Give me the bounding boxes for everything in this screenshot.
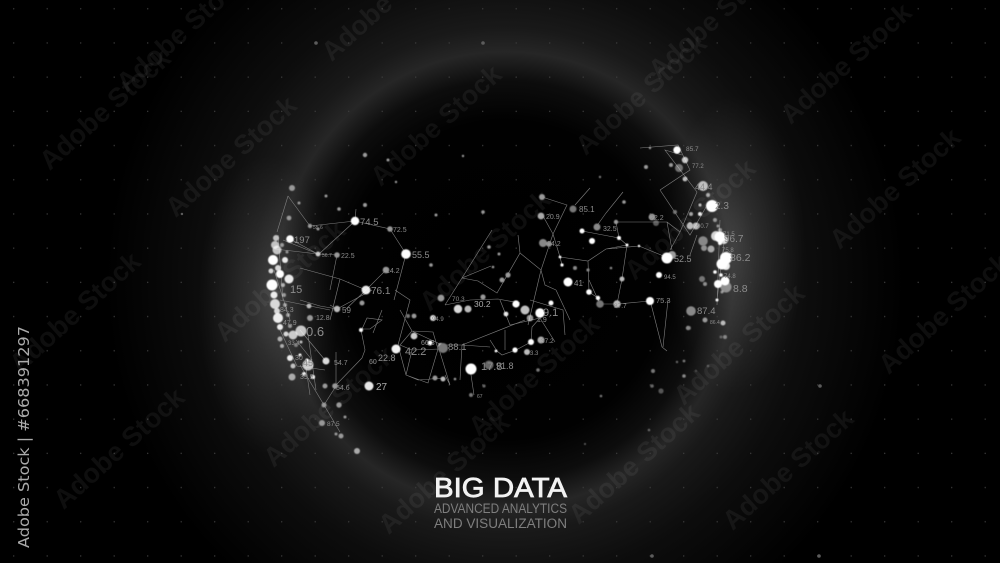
- highlighted grid dots: [181, 41, 822, 558]
- data labels: 20.9: [546, 214, 560, 221]
- central and sparse data nodes: [286, 147, 709, 454]
- data labels: 8.8: [733, 283, 748, 295]
- data labels: 14.2: [386, 268, 400, 275]
- data labels: 22.5: [341, 253, 355, 260]
- title: BIG DATA: BIG DATA: [434, 472, 567, 503]
- data labels: 86.4: [710, 320, 720, 326]
- data labels: 56.7: [322, 253, 332, 259]
- watermark: Adobe Stock: [775, 0, 918, 130]
- data labels: 74.8: [724, 274, 736, 280]
- data labels: 85.7: [686, 146, 699, 153]
- data labels: 94.5: [664, 275, 676, 281]
- data labels: 30: [295, 355, 303, 362]
- data labels: 91.8: [496, 361, 514, 371]
- data labels: 37.2: [541, 338, 554, 345]
- data labels: 76.1: [371, 286, 391, 297]
- watermark: Adobe Stock: [365, 58, 508, 192]
- data labels: 96.7: [724, 234, 744, 245]
- data labels: 27: [376, 382, 388, 393]
- data labels: 2.3: [715, 201, 729, 212]
- glow behind left edge of sphere: [198, 155, 338, 455]
- title block: [434, 472, 567, 531]
- data labels: 87.7: [614, 303, 627, 310]
- right edge cluster: [673, 146, 732, 302]
- data labels: 60: [369, 359, 377, 366]
- watermark: Adobe Stock: [463, 308, 606, 442]
- data labels: 66.3: [421, 340, 435, 347]
- data labels: 30.2: [474, 299, 491, 309]
- data labels: 197: [294, 235, 310, 246]
- watermark: Adobe Stock: [209, 214, 352, 348]
- watermark: Adobe Stock: [34, 42, 177, 176]
- watermark: Adobe Stock: [668, 277, 811, 411]
- watermark: Adobe Stock: [48, 381, 191, 515]
- data labels: 39.9: [300, 374, 314, 381]
- data labels: 0.6: [306, 324, 324, 339]
- watermark: Adobe Stock: [619, 152, 762, 286]
- watermark: Adobe Stock: [824, 121, 967, 255]
- data labels: 86.2: [730, 252, 751, 264]
- data labels: 87.5: [327, 421, 340, 428]
- watermark: Adobe Stock: [373, 406, 516, 540]
- data labels: 55.6: [313, 225, 323, 231]
- data labels: 74.5: [360, 217, 378, 228]
- data labels: 71.5: [723, 232, 735, 238]
- right outer gray nodes: [686, 223, 727, 339]
- data labels: 88.1: [448, 342, 466, 353]
- data labels: 52.5: [674, 254, 692, 264]
- data labels: [280, 146, 751, 428]
- data labels: 1.9: [537, 317, 547, 324]
- watermark: Adobe Stock: [563, 396, 706, 530]
- stock id caption: Adobe Stock | #668391297: [15, 326, 33, 548]
- data labels: 33.4: [288, 341, 300, 347]
- data labels: 44.4: [695, 182, 713, 192]
- data labels: 94.9: [432, 317, 444, 323]
- subtitle lines: ADVANCED ANALYTICS: [434, 501, 567, 516]
- data labels: 85.1: [579, 205, 595, 214]
- data labels: 47.9: [283, 320, 297, 327]
- data labels: 70.3: [452, 296, 465, 303]
- data labels: 12.8: [316, 315, 330, 322]
- data labels: 77.2: [692, 164, 704, 170]
- data labels: 3.3: [530, 351, 539, 357]
- data labels: 55.5: [412, 250, 430, 260]
- watermark: Adobe Stock: [414, 183, 557, 317]
- data labels: 9.1: [543, 307, 558, 319]
- data labels: 75.8: [722, 248, 734, 254]
- network links: [274, 145, 725, 432]
- data labels: 67: [477, 394, 483, 400]
- data labels: 41: [574, 279, 583, 288]
- watermark: Adobe Stock: [4, 245, 147, 379]
- watermark: Adobe Stock: [160, 89, 303, 223]
- data labels: 42.2: [405, 346, 426, 358]
- watermark: Adobe Stock: [717, 402, 860, 536]
- data labels: 72.5: [393, 227, 407, 234]
- data labels: 32.5: [603, 226, 617, 233]
- left edge cluster: [266, 235, 315, 380]
- data labels: 84.3: [280, 307, 294, 314]
- data labels: 87.4: [697, 306, 716, 317]
- data labels: 90.7: [697, 224, 709, 230]
- data labels: 17.8: [481, 361, 502, 373]
- watermark: Adobe Stock: [570, 27, 713, 161]
- data labels: 45: [303, 358, 313, 368]
- data labels: 22.8: [378, 353, 396, 363]
- data labels: 64.2: [547, 241, 561, 248]
- data labels: 22.2: [650, 215, 664, 222]
- watermark: Adobe Stock: [258, 339, 401, 473]
- data labels: 75.3: [656, 296, 671, 305]
- subtitle lines: AND VISUALIZATION: [434, 516, 567, 531]
- subtitle lines: [434, 501, 567, 531]
- data labels: 15: [290, 284, 302, 296]
- data labels: 54.7: [334, 360, 348, 367]
- data labels: 59: [342, 306, 351, 315]
- glow behind right edge of sphere: [665, 95, 805, 395]
- data labels: 54.6: [336, 385, 350, 392]
